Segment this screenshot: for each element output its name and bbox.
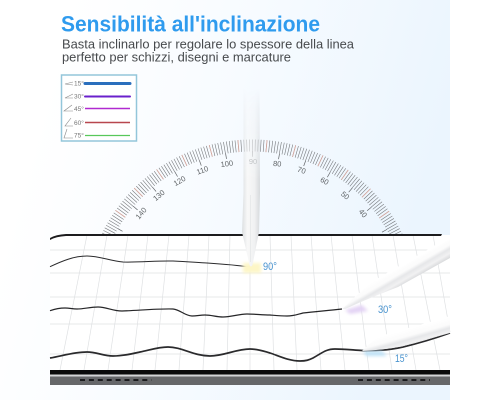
legend row 45 degrees: 45° [74,105,84,113]
pen tip glow yellow [243,263,261,273]
legend row 15 degrees: 15° [74,80,84,88]
drawn line 15 degrees [50,333,450,361]
pen at 30 degrees [342,237,450,309]
protractor numbers: 120 [172,174,187,188]
tablet [50,234,450,385]
protractor numbers: 70 [296,165,307,176]
legend row 75 degrees: 75° [74,132,84,140]
tablet screen [50,235,450,371]
legend row 60 degrees: 60° [74,119,84,127]
tablet silver rim [50,374,450,376]
protractor ticks [102,140,402,234]
protractor numbers: 100 [220,158,234,169]
protractor numbers [134,158,369,221]
protractor numbers: 60 [319,175,330,187]
tablet side body [50,376,450,385]
description text: perfetto per schizzi, disegni e marcature [62,50,291,64]
label 30 degrees: 30° [378,304,392,316]
pen at 15 degrees [362,316,450,351]
protractor numbers: 110 [195,164,210,177]
protractor 90 mark seen through pen: 90 [249,157,257,166]
label 90 degrees: 90° [263,261,277,273]
protractor numbers: 80 [273,159,282,169]
protractor numbers: 130 [151,188,167,203]
pen tip glow blue [363,351,387,356]
protractor [102,140,402,234]
description text [62,38,354,64]
protractor numbers: 40 [357,207,369,219]
angle labels [263,261,408,365]
tablet bottom bezel [50,370,450,374]
protractor numbers: 50 [339,189,351,202]
title: Sensibilità all'inclinazione [61,12,320,36]
legend: line thickness by angle [62,75,136,141]
speaker grille right [358,379,430,381]
pen at 90 degrees [242,106,260,266]
drawn line 90 degrees [50,256,250,267]
pen tip glow purple [345,305,368,314]
legend row 30 degrees: 30° [74,92,84,100]
label 15 degrees: 15° [395,353,408,365]
description text: Basta inclinarlo per regolare lo spessore della linea [62,38,354,52]
speaker grille left [80,379,152,381]
protractor numbers: 140 [134,206,149,221]
drawn line 30 degrees [50,307,342,317]
tablet top edge [50,234,442,240]
screen grid [50,235,450,370]
